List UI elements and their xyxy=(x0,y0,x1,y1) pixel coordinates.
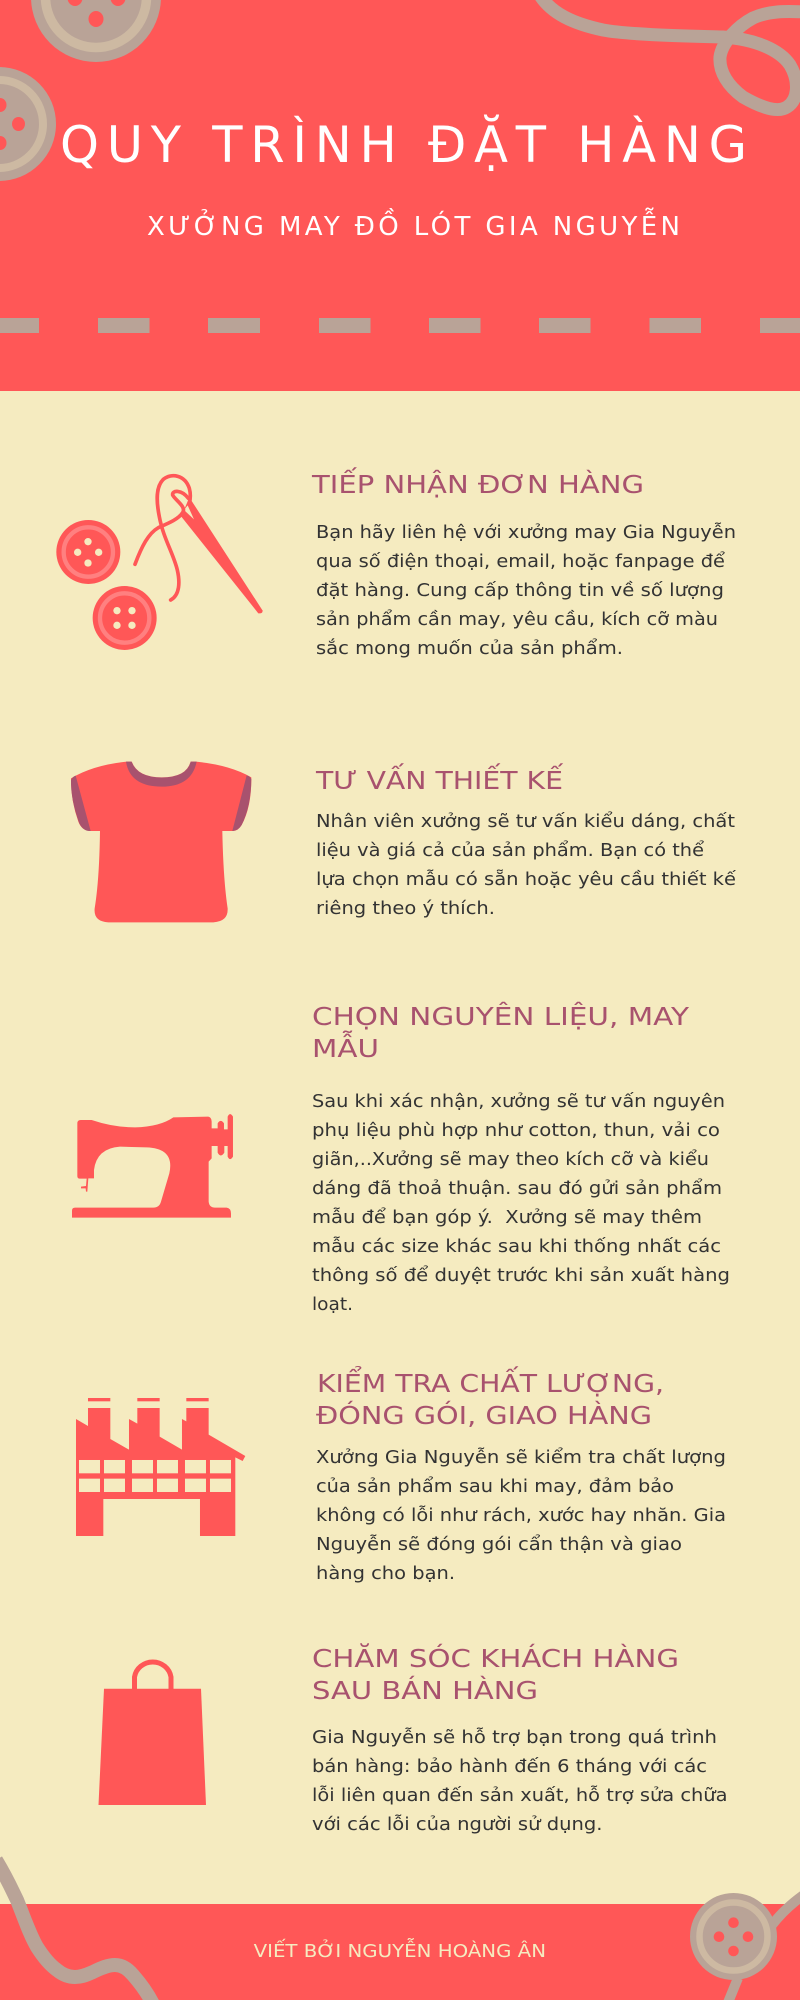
header panel xyxy=(0,0,800,391)
heading: TIẾP NHẬN ĐƠN HÀNG xyxy=(311,467,644,499)
icon: bottom-right button and thread xyxy=(690,1893,800,2000)
footer panel xyxy=(0,1860,800,2000)
icon: shopping bag xyxy=(98,1662,206,1805)
body text: Sau khi xác nhận, xưởng sẽ tư vấn nguyên xyxy=(312,1091,725,1112)
body text: không có lỗi như rách, xước hay nhăn. Gia xyxy=(316,1505,726,1526)
body text: Bạn hãy liên hệ với xưởng may Gia Nguyễn xyxy=(316,522,736,543)
body text: Nhân viên xưởng sẽ tư vấn kiểu dáng, chất xyxy=(316,811,735,832)
body text: lỗi liên quan đến sản xuất, hỗ trợ sửa chữa xyxy=(312,1785,728,1806)
body text xyxy=(316,811,736,919)
icon: factory xyxy=(76,1398,245,1536)
body text: dáng đã thoả thuận. sau đó gửi sản phẩm xyxy=(312,1178,722,1199)
body text: bán hàng: bảo hành đến 6 tháng với các xyxy=(312,1756,707,1777)
body text: Nguyễn sẽ đóng gói cẩn thận và giao xyxy=(316,1534,682,1555)
icon: sewing machine xyxy=(72,1114,233,1218)
heading: MẪU xyxy=(312,1030,379,1063)
body text: sản phẩm cần may, yêu cầu, kích cỡ màu xyxy=(316,609,718,630)
body text xyxy=(312,1091,730,1315)
step 4: quality check and delivery xyxy=(76,1366,726,1584)
body text: với các lỗi của người sử dụng. xyxy=(312,1814,602,1835)
body text xyxy=(316,1447,726,1584)
body text: lựa chọn mẫu có sẵn hoặc yêu cầu thiết kế xyxy=(316,869,736,890)
body text xyxy=(316,522,736,659)
body text: qua số điện thoại, email, hoặc fanpage để xyxy=(316,551,725,572)
body text: của sản phẩm sau khi may, đảm bảo xyxy=(316,1476,674,1497)
body text: hàng cho bạn. xyxy=(316,1564,455,1584)
icon: buttons and needle xyxy=(56,476,263,650)
body text: sắc mong muốn của sản phẩm. xyxy=(316,638,623,659)
heading: ĐÓNG GÓI, GIAO HÀNG xyxy=(316,1400,652,1430)
body text: đặt hàng. Cung cấp thông tin về số lượng xyxy=(316,580,724,601)
heading: SAU BÁN HÀNG xyxy=(312,1676,538,1705)
step 1: order intake xyxy=(56,467,736,659)
icon: left button xyxy=(0,67,56,181)
heading xyxy=(316,1366,664,1430)
body text: Gia Nguyễn sẽ hỗ trợ bạn trong quá trình xyxy=(312,1727,717,1748)
step 5: after-sales care xyxy=(98,1643,728,1835)
heading: CHĂM SÓC KHÁCH HÀNG xyxy=(312,1643,679,1673)
body text: liệu và giá cả của sản phẩm. Bạn có thể xyxy=(316,840,704,861)
title: QUY TRÌNH ĐẶT HÀNG xyxy=(60,114,747,174)
body text: riêng theo ý thích. xyxy=(316,899,495,919)
icon: top button xyxy=(31,0,161,62)
step 2: design consulting xyxy=(71,761,736,922)
icon: thread loop xyxy=(538,0,800,110)
icon: t-shirt xyxy=(71,761,251,922)
heading: TƯ VẤN THIẾT KẾ xyxy=(315,763,563,795)
heading xyxy=(312,1002,690,1063)
step 3: materials and sampling xyxy=(72,1002,730,1315)
body text: Xưởng Gia Nguyễn sẽ kiểm tra chất lượng xyxy=(316,1447,726,1468)
body text: mẫu các size khác sau khi thống nhất các xyxy=(312,1236,721,1257)
heading xyxy=(312,1643,679,1705)
heading: KIỂM TRA CHẤT LƯỢNG, xyxy=(317,1366,664,1398)
stitched divider xyxy=(0,318,800,333)
body text xyxy=(312,1727,728,1835)
body text: thông số để duyệt trước khi sản xuất hàng xyxy=(312,1265,730,1286)
icon: bottom-left thread xyxy=(0,1860,153,2000)
heading: CHỌN NGUYÊN LIỆU, MAY xyxy=(312,1002,690,1031)
subtitle: XƯỞNG MAY ĐỒ LÓT GIA NGUYỄN xyxy=(147,206,680,242)
body text: phụ liệu phù hợp như cotton, thun, vải co xyxy=(312,1121,720,1141)
body text: giãn,..Xưởng sẽ may theo kích cỡ và kiểu xyxy=(312,1149,709,1170)
footer text: VIẾT BỞI NGUYỄN HOÀNG ÂN xyxy=(254,1938,546,1962)
body text: loạt. xyxy=(312,1295,353,1315)
body text: mẫu để bạn góp ý. Xưởng sẽ may thêm xyxy=(312,1207,702,1228)
